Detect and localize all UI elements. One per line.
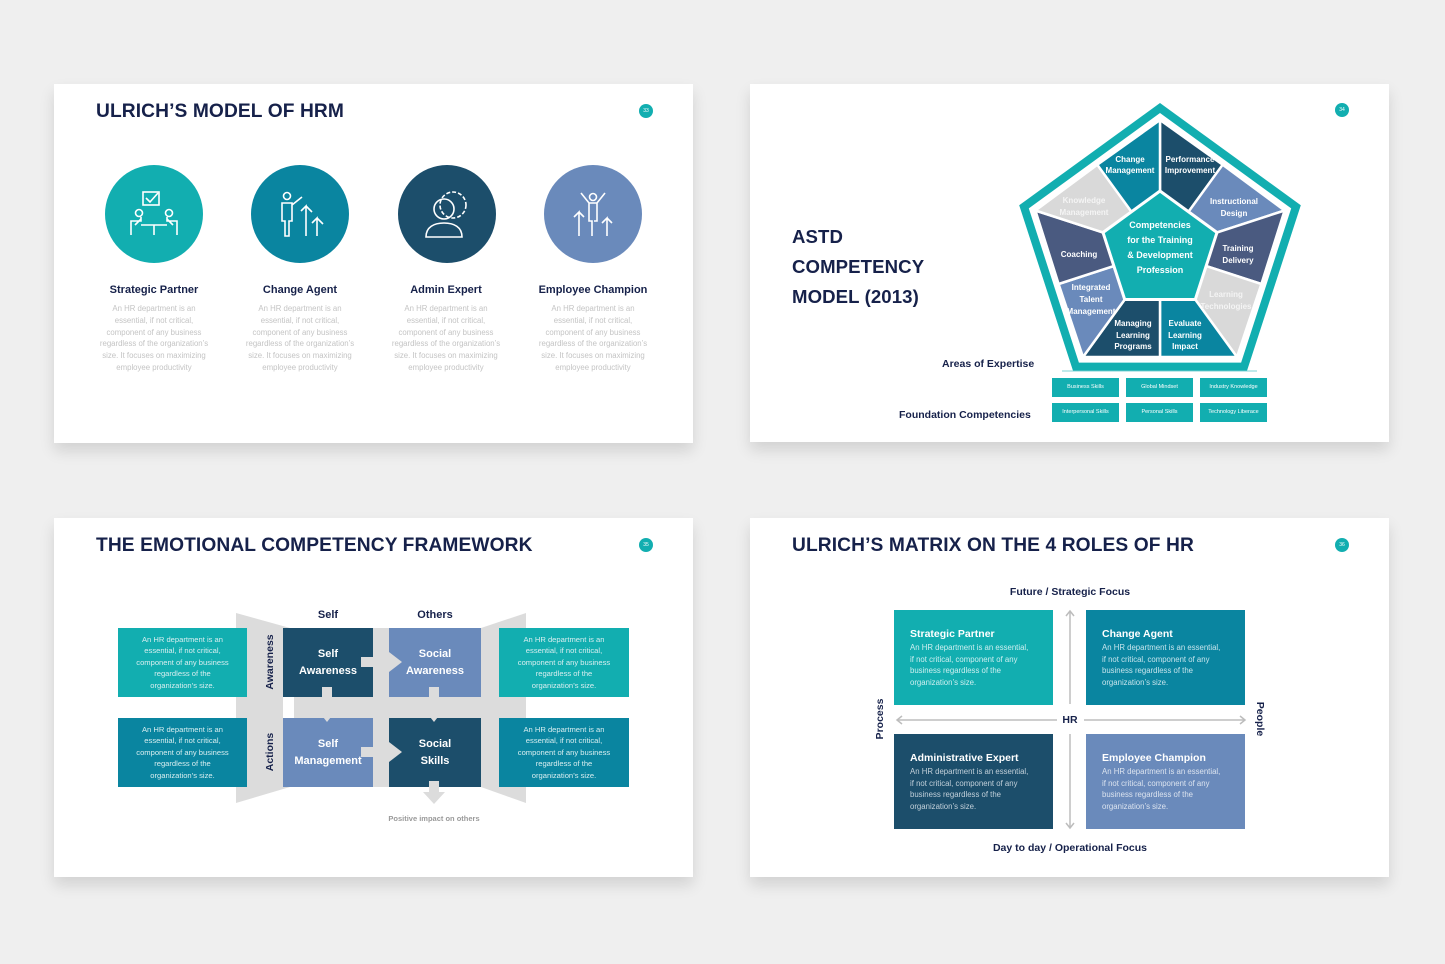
chart: ASTD pentagon: Design — [1221, 209, 1247, 218]
box: Change Agent: An HR department is an essential, if not critical, component of any business regardless of the organization’s size. — [1102, 643, 1220, 687]
title: ASTD — [792, 226, 843, 247]
gray bow-tie backgrounds — [236, 613, 526, 803]
foundation competency boxes: Technology Liberace — [1208, 409, 1259, 415]
box: Self Management: Management — [294, 754, 362, 766]
title: MODEL (2013) — [792, 286, 919, 307]
icon: employee champion — [544, 165, 642, 263]
box: Administrative Expert: An HR department is an essential, if not critical, component of any business regardless of the organization’s size. — [910, 767, 1028, 811]
page number: 35 — [643, 542, 649, 548]
box: Social Skills — [389, 718, 481, 787]
text box bottom-left: component of any business — [136, 748, 229, 757]
chart: ASTD pentagon: Learning — [1116, 331, 1150, 340]
page number — [1335, 538, 1349, 552]
axis label: Actions: Actions — [264, 733, 276, 771]
axis label top: Future / Strategic Focus — [1010, 586, 1130, 598]
text box top-left: component of any business — [136, 658, 229, 667]
heading: Admin Expert: Admin Expert — [410, 284, 482, 296]
box: Change Agent — [1086, 610, 1245, 705]
axis label: Awareness: Awareness — [264, 634, 276, 690]
text box top-left: essential, if not critical, — [144, 646, 221, 655]
panel: Ulrich's matrix — [750, 518, 1389, 877]
caption: positive impact: Positive impact on others — [388, 814, 480, 823]
heading: Change Agent: Change Agent — [263, 284, 337, 296]
heading: Employee Champion: Employee Champion — [539, 284, 647, 296]
text box bottom-left: regardless of the — [154, 759, 211, 768]
chart: ASTD pentagon: Learning — [1168, 331, 1202, 340]
panel: ASTD competency model — [750, 84, 1389, 442]
foundation competency boxes: Business Skills — [1067, 384, 1104, 390]
page number — [639, 538, 653, 552]
text box bottom-left: essential, if not critical, — [144, 736, 221, 745]
text box top-right: regardless of the — [536, 669, 592, 678]
box: Social Awareness — [389, 628, 481, 697]
box: Strategic Partner: An HR department is an essential, if not critical, component of any business regardless of the organization’s size. — [910, 643, 1028, 687]
chart: ASTD pentagon: Instructional — [1210, 197, 1258, 206]
box: Strategic Partner: Strategic Partner — [910, 628, 995, 640]
chart: ASTD pentagon: Training — [1222, 244, 1254, 253]
chart: ASTD pentagon: & Development — [1127, 250, 1193, 260]
page number — [1335, 103, 1349, 117]
chart: ASTD pentagon: Impact — [1172, 342, 1198, 351]
title: COMPETENCY — [792, 256, 924, 277]
chart: ASTD pentagon: Profession — [1137, 265, 1183, 275]
text box top-left — [118, 628, 247, 697]
box: Social Skills: Social — [419, 738, 451, 750]
text block 2: An HR department is an essential, if not critical, component of any business regardless of the organization’s size. It focuses on maximizing employee productivity — [246, 304, 354, 372]
chart: ASTD pentagon: Competencies — [1129, 220, 1191, 230]
chart: ASTD pentagon: for the Training — [1127, 235, 1193, 245]
text box top-left: An HR department is an — [142, 635, 223, 644]
box: Employee Champion — [1086, 734, 1245, 829]
chart: ASTD pentagon: Programs — [1114, 342, 1152, 351]
chart: ASTD pentagon: Talent — [1080, 295, 1103, 304]
text box bottom-right: essential, if not critical, — [526, 736, 602, 745]
heading: Others: Others — [417, 609, 453, 621]
chart: ASTD pentagon: Knowledge — [1063, 196, 1106, 205]
page number: 34 — [1339, 107, 1345, 113]
foundation competency boxes: Industry Knowledge — [1209, 384, 1258, 390]
text block 3: An HR department is an essential, if not critical, component of any business regardless of the organization’s size. It focuses on maximizing employee productivity — [392, 304, 500, 372]
text box bottom-right: regardless of the — [536, 759, 592, 768]
chart: ASTD pentagon: Change — [1115, 155, 1145, 164]
box: Change Agent: Change Agent — [1102, 628, 1173, 640]
chart: ASTD pentagon: Technologies — [1201, 302, 1252, 311]
title — [792, 226, 924, 307]
text box top-right: An HR department is an — [523, 635, 605, 644]
axis label bottom: Day to day / Operational Focus — [993, 842, 1147, 854]
text box bottom-right: component of any business — [518, 748, 610, 757]
label: areas of expertise: Areas of Expertise — [942, 358, 1034, 370]
box: Employee Champion: Employee Champion — [1102, 752, 1206, 764]
icon: strategic partner — [105, 165, 203, 263]
chart: ASTD pentagon: Management — [1060, 208, 1109, 217]
page number — [639, 104, 653, 118]
chart: ASTD pentagon: Improvement — [1165, 166, 1215, 175]
heading: Self: Self — [318, 609, 338, 621]
foundation competency boxes: Global Mindset — [1141, 384, 1178, 390]
chart: ASTD pentagon: Learning — [1209, 290, 1243, 299]
foundation competency boxes — [1052, 370, 1267, 422]
chart: ASTD pentagon: Integrated — [1072, 283, 1110, 292]
text box bottom-left: An HR department is an — [142, 725, 223, 734]
axis label: Process: Process — [874, 699, 886, 739]
icon: change agent — [251, 165, 349, 263]
text box bottom-left: organization’s size. — [150, 771, 215, 780]
box: Social Skills: Skills — [421, 754, 449, 766]
text box bottom-right: organization’s size. — [532, 771, 596, 780]
chart: ASTD pentagon: Management — [1106, 166, 1155, 175]
text box top-left: regardless of the — [154, 669, 211, 678]
foundation competency boxes: Interpersonal Skills — [1062, 409, 1109, 415]
label: foundation competencies: Foundation Competencies — [899, 409, 1031, 421]
chart: ASTD pentagon: Evaluate — [1169, 319, 1202, 328]
box: Social Awareness: Social — [419, 648, 451, 660]
title: ULRICH’S MATRIX ON THE 4 ROLES OF HR — [792, 535, 1194, 556]
text box top-right: essential, if not critical, — [526, 646, 602, 655]
text box bottom-right: An HR department is an — [523, 725, 605, 734]
page number: 33 — [643, 108, 649, 114]
arrows between boxes — [322, 652, 445, 804]
box: Self Management — [283, 718, 373, 787]
box: Self Awareness — [283, 628, 373, 697]
page number: 36 — [1339, 542, 1345, 548]
chart: ASTD pentagon: Managing — [1114, 319, 1152, 328]
axis label: People: People — [1254, 702, 1266, 736]
box: Self Awareness: Self — [318, 648, 338, 660]
foundation competency boxes: Personal Skills — [1141, 409, 1178, 415]
box: Administrative Expert: Administrative Expert — [910, 752, 1019, 764]
text box top-right: organization’s size. — [532, 681, 596, 690]
box: Strategic Partner — [894, 610, 1053, 705]
axes arrows — [896, 610, 1246, 829]
box: Social Awareness: Awareness — [406, 664, 464, 676]
text box top-right — [499, 628, 629, 697]
heading: Strategic Partner: Strategic Partner — [110, 284, 198, 296]
text block 1: An HR department is an essential, if not critical, component of any business regardless of the organization’s size. It focuses on maximizing employee productivity — [100, 304, 208, 372]
chart: ASTD pentagon: Coaching — [1061, 250, 1097, 259]
box: Self Management: Self — [318, 738, 338, 750]
chart: ASTD pentagon: Management — [1067, 307, 1116, 316]
box: Self Awareness: Awareness — [299, 664, 357, 676]
text box bottom-left — [118, 718, 247, 787]
title: ULRICH’S MODEL OF HRM — [96, 101, 344, 122]
label: HR: HR — [1062, 714, 1078, 726]
chart: ASTD pentagon: Performance — [1166, 155, 1215, 164]
panel: Ulrich's model of HRM — [54, 84, 693, 443]
panel: emotional competency framework — [54, 518, 693, 877]
text box top-left: organization’s size. — [150, 681, 215, 690]
box: Administrative Expert — [894, 734, 1053, 829]
text box top-right: component of any business — [518, 658, 610, 667]
text box bottom-right — [499, 718, 629, 787]
icon: admin expert — [398, 165, 496, 263]
text block 4: An HR department is an essential, if not critical, component of any business regardless of the organization’s size. It focuses on maximizing employee productivity — [539, 304, 647, 372]
box: Employee Champion: An HR department is an essential, if not critical, component of any business regardless of the organization’s size. — [1102, 767, 1220, 811]
chart: ASTD pentagon: Delivery — [1222, 256, 1254, 265]
title: THE EMOTIONAL COMPETENCY FRAMEWORK — [96, 535, 533, 556]
